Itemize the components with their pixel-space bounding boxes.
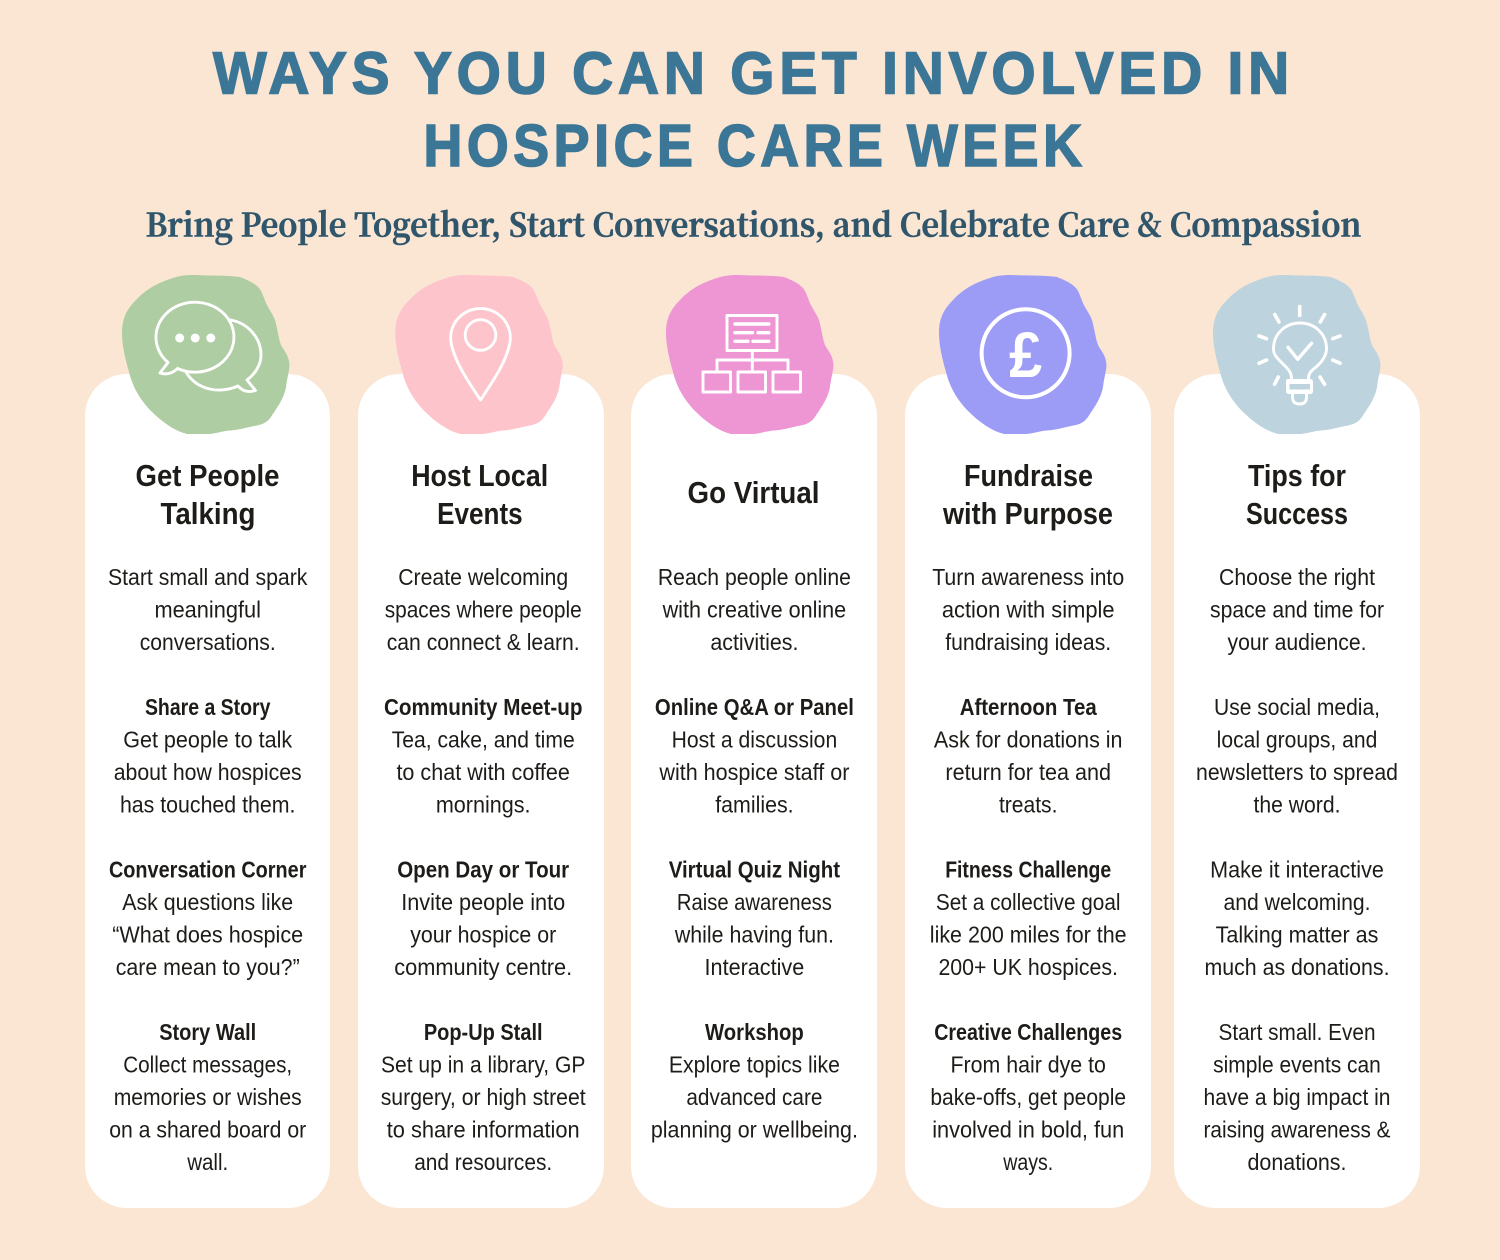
subtitle: Bring People Together, Start Conversations, and Celebrate Care & Compassion [146,200,1362,246]
heading: Host Local [411,458,548,493]
idea: pop-up stall: to share information [387,1116,580,1142]
heading: Get People [136,458,280,493]
heading [942,458,1113,531]
idea: online q&a or panel: families. [715,792,794,818]
intro text: activities. [710,629,798,655]
intro text: Start small and spark [108,564,308,590]
heading [1246,458,1348,531]
idea: community meet-up: mornings. [436,792,531,818]
idea: creative challenges: Creative Challenges [934,1019,1122,1045]
intro text: can connect & learn. [387,629,580,655]
tip: spread the word: Use social media, [1214,694,1380,720]
tip: right space and time [1210,564,1384,655]
intro text: spaces where people [385,596,582,622]
idea: pop-up stall: surgery, or high street [381,1084,586,1110]
idea: workshop: planning or wellbeing. [651,1116,858,1142]
idea: open day or tour: Open Day or Tour [397,856,569,882]
idea: virtual quiz night: Interactive [705,954,804,980]
intro text: Reach people online [658,564,851,590]
card background [631,374,877,1208]
icon: pound coin [939,275,1106,434]
tip: right space and time: Choose the right [1219,564,1375,590]
tip: interactive and welcoming: Talking matter as [1216,922,1378,948]
idea: conversation corner: care mean to you?” [116,954,300,980]
idea: virtual quiz night: Raise awareness [677,889,832,915]
intro text [385,564,582,655]
idea: share a story: Share a Story [145,694,270,720]
intro text [932,564,1124,655]
idea: community meet-up [384,694,582,818]
tip: interactive and welcoming: much as donations. [1204,954,1390,980]
idea: pop-up stall: Set up in a library, GP [381,1052,585,1078]
idea: story wall: Collect messages, [123,1052,292,1078]
title: HOSPICE CARE WEEK [424,113,1086,179]
intro text: Turn awareness into [932,564,1124,590]
idea: story wall: on a shared board or [109,1116,306,1142]
idea: creative challenges: From hair dye to [950,1052,1106,1078]
idea: afternoon tea: treats. [999,792,1057,818]
idea: fitness challenge [930,856,1127,980]
intro text [658,564,851,655]
tip: spread the word [1196,694,1398,818]
idea: workshop: Explore topics like [669,1052,840,1078]
panel: host local events [358,275,604,1208]
idea: community meet-up: Tea, cake, and time [392,726,575,752]
idea: virtual quiz night [669,856,840,980]
heading: Go Virtual [688,475,820,510]
icon: organisation chart [666,275,834,434]
idea: share a story: about how hospices [114,759,302,785]
tip: spread the word: the word. [1254,792,1340,818]
idea: afternoon tea: return for tea and [945,759,1111,785]
idea: pop-up stall: Pop-Up Stall [424,1019,543,1045]
title [213,40,1294,179]
idea: open day or tour: community centre. [394,954,572,980]
card background [358,374,604,1208]
idea: open day or tour: your hospice or [410,922,556,948]
idea: conversation corner: Conversation Corner [109,856,306,882]
intro text [108,564,308,655]
tip: start small [1204,1019,1391,1175]
idea: virtual quiz night: while having fun. [674,922,834,948]
heading: Talking [160,496,256,531]
idea: story wall: wall. [186,1149,228,1175]
idea: pop-up stall: and resources. [414,1149,552,1175]
idea: workshop [651,1019,858,1142]
card background [85,374,330,1208]
tip: start small: have a big impact in [1204,1084,1390,1110]
idea: community meet-up: Community Meet-up [384,694,582,720]
idea: creative challenges: bake-offs, get people [930,1084,1126,1110]
intro text: action with simple [942,596,1115,622]
idea: creative challenges [930,1019,1126,1175]
intro text: conversations. [140,629,276,655]
idea: online q&a or panel: Host a discussion [672,726,837,752]
icon: speech bubbles [122,275,290,434]
idea: online q&a or panel: with hospice staff or [658,759,850,785]
idea: afternoon tea: Ask for donations in [934,726,1122,752]
heading: Tips for [1248,458,1346,493]
card background [905,374,1151,1208]
panel: tips for success [1174,275,1420,1208]
intro text: meaningful [154,596,261,622]
idea: online q&a or panel: Online Q&A or Panel [655,694,854,720]
idea: afternoon tea: Afternoon Tea [960,694,1097,720]
idea: story wall [109,1019,306,1175]
idea: workshop: Workshop [705,1019,804,1045]
idea: share a story: has touched them. [120,792,295,818]
idea: fitness challenge: Fitness Challenge [945,856,1111,882]
idea: fitness challenge: like 200 miles for the [930,922,1127,948]
heading: with Purpose [942,496,1113,531]
icon: map pin [395,275,563,434]
idea: open day or tour: Invite people into [401,889,565,915]
panel: get people talking [85,275,330,1208]
idea: online q&a or panel [655,694,854,818]
idea: open day or tour [394,856,572,980]
intro text: fundraising ideas. [945,629,1111,655]
heading: Success [1246,496,1348,531]
panel: fundraise with purpose [905,275,1151,1208]
idea: story wall: Story Wall [159,1019,256,1045]
idea: fitness challenge: Set a collective goal [936,889,1120,915]
panel: go virtual [631,275,877,1208]
idea: conversation corner: Ask questions like [122,889,293,915]
idea: conversation corner: “What does hospice [112,922,303,948]
heading [136,458,280,531]
idea: creative challenges: involved in bold, fun [932,1116,1124,1142]
icon: pound coin: £ [1009,319,1042,391]
idea: share a story: Get people to talk [123,726,292,752]
intro text: Create welcoming [398,564,568,590]
tip: start small: Start small. Even [1218,1019,1376,1045]
idea: share a story [114,694,302,818]
title: WAYS YOU CAN GET INVOLVED IN [213,40,1294,106]
tip: interactive and welcoming: and welcoming. [1224,889,1370,915]
tip: spread the word: newsletters to spread [1196,759,1398,785]
icon: light bulb with check [1213,275,1380,434]
card background [1174,374,1420,1208]
tip: interactive and welcoming: Make it interactive [1210,856,1384,882]
heading [411,458,548,531]
tip: start small: raising awareness & [1204,1116,1391,1142]
idea: conversation corner [109,856,306,980]
idea: creative challenges: ways. [1002,1149,1053,1175]
idea: fitness challenge: 200+ UK hospices. [938,954,1118,980]
tip: start small: donations. [1248,1149,1346,1175]
heading: Events [437,496,523,531]
tip: start small: simple events can [1213,1052,1381,1078]
idea: workshop: advanced care [686,1084,822,1110]
heading: Fundraise [964,458,1093,493]
idea: pop-up stall [381,1019,586,1175]
idea: afternoon tea [934,694,1122,818]
idea: community meet-up: to chat with coffee [396,759,570,785]
intro text: with creative online [662,596,846,622]
tip: interactive and welcoming [1204,856,1390,980]
tip: right space and time: your audience. [1228,629,1366,655]
tip: spread the word: local groups, and [1217,726,1377,752]
idea: story wall: memories or wishes [114,1084,302,1110]
idea: virtual quiz night: Virtual Quiz Night [669,856,840,882]
tip: right space and time: space and time for [1210,596,1384,622]
